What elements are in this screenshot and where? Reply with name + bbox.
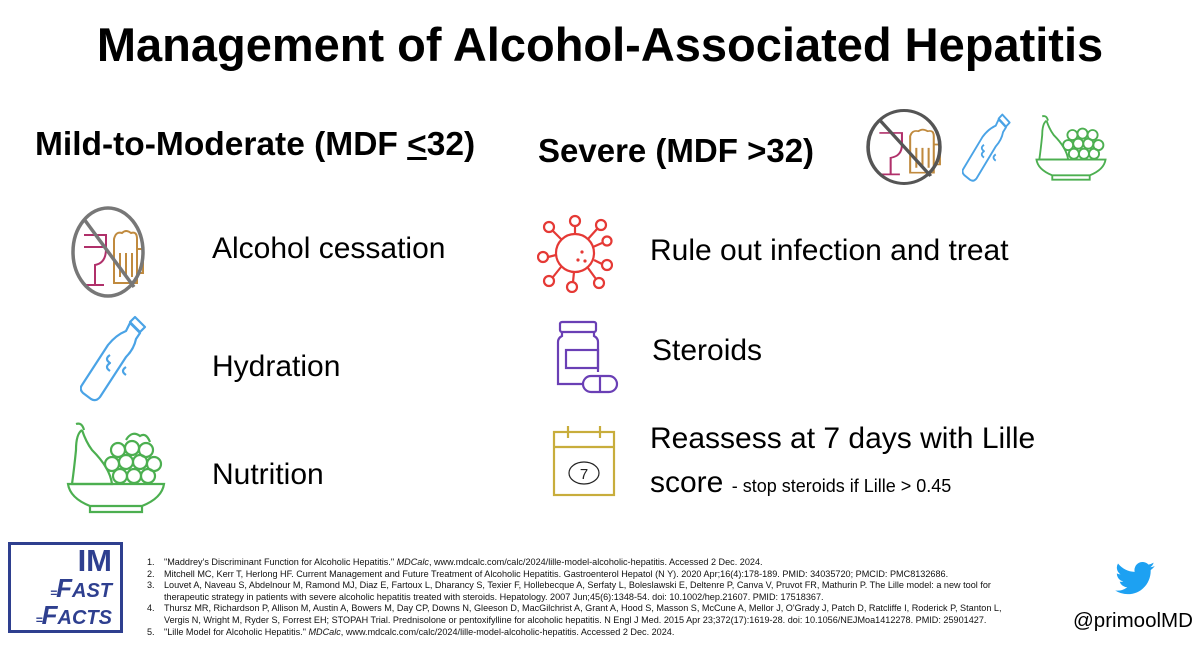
title: Management of Alcohol-Associated Hepatitis [97,18,1103,71]
references: "Lille Model for Alcoholic Hepatitis." MDCalc, www.mdcalc.com/calc/2024/lille-model-alcoholic-hepatitis. Accessed 2 Dec. 2024. [164,627,674,637]
text: steroids: Steroids [652,334,762,367]
heading: mild-to-moderate: Mild-to-Moderate (MDF <32) [35,126,475,163]
text: rule out infection: Rule out infection and treat [650,234,1009,267]
references: "Maddrey's Discriminant Function for Alcoholic Hepatitis." MDCalc, www.mdcalc.com/calc/2024/lille-model-alcoholic-hepatitis. Accessed 2 Dec. 2024. [164,557,763,567]
icon: calendar [552,426,616,496]
references: Louvet A, Naveau S, Abdelnour M, Ramond MJ, Diaz E, Fartoux L, Dharancy S, Texier F, Hollebecque A, Serfaty L, Boleslawski E, Deltenre P, Canva V, Pruvot FR, Mathurin P. The Lille model: a new tool for [164,580,991,590]
icon: water bottle (left) [80,316,146,402]
references [147,557,1002,637]
references: therapeutic strategy in patients with severe alcoholic hepatitis treated with steroids. Hepatology. 2007 Jun;45(6):1348-54. doi: 10.1002/hep.21607. PMID: 17518367. [164,592,824,602]
icon: bottle small [962,114,1011,182]
references: 3. [147,580,155,590]
icon: virus [537,214,613,293]
icon: twitter bird [1115,562,1155,594]
logo: IM Fast Facts [8,542,123,633]
logo: IM Fast Facts: IM [78,543,112,578]
logo: IM Fast Facts: =FAST [50,573,112,603]
text: alcohol cessation: Alcohol cessation [212,232,445,265]
text: nutrition: Nutrition [212,458,324,491]
text: handle: @primoolMD [1073,609,1193,632]
references: Vergis N, Wright M, Ryder S, Forrest EH; STOPAH Trial. Prednisolone or pentoxifylline for alcoholic hepatitis. N Engl J Med. 2015 Apr 23;372(17):1619-28. doi: 10.1056/NEJMoa1412278. PMID: 25901427. [164,615,986,625]
references: Thursz MR, Richardson P, Allison M, Austin A, Bowers M, Day CP, Downs N, Gleeson D, MacGilchrist A, Grant A, Hood S, Masson S, McCune A, Mellor J, O'Grady J, Patch D, Ratcliffe I, Roderick P, Stanton L, [164,603,1002,613]
text: reassess [650,422,1035,499]
icon: no alcohol (left) [71,206,145,298]
references: Mitchell MC, Kerr T, Herlong HF. Current Management and Future Treatment of Alcoholic Hepatitis. Gastroenterol Hepatol (N Y). 2020 Apr;16(4):178-189. PMID: 34035720; PMCID: PMC8132686. [164,569,948,579]
text: reassess: Reassess at 7 days with Lille [650,422,1035,455]
text: hydration: Hydration [212,350,340,383]
text: reassess: score - stop steroids if Lille > 0.45 [650,466,951,499]
references: 5. [147,627,155,637]
icon: calendar: 7 [580,466,588,483]
icon: fruit bowl small [1035,115,1107,181]
references: 1. [147,557,155,567]
references: 2. [147,569,155,579]
icon row: severe supportive care [866,109,1107,185]
logo: IM Fast Facts: =FACTS [36,600,112,630]
heading: severe: Severe (MDF >32) [538,132,814,169]
icon: pill bottle [556,320,618,394]
icon: fruit bowl (left) [66,422,166,514]
references: 4. [147,603,155,613]
icon: no alcohol small [866,109,942,185]
